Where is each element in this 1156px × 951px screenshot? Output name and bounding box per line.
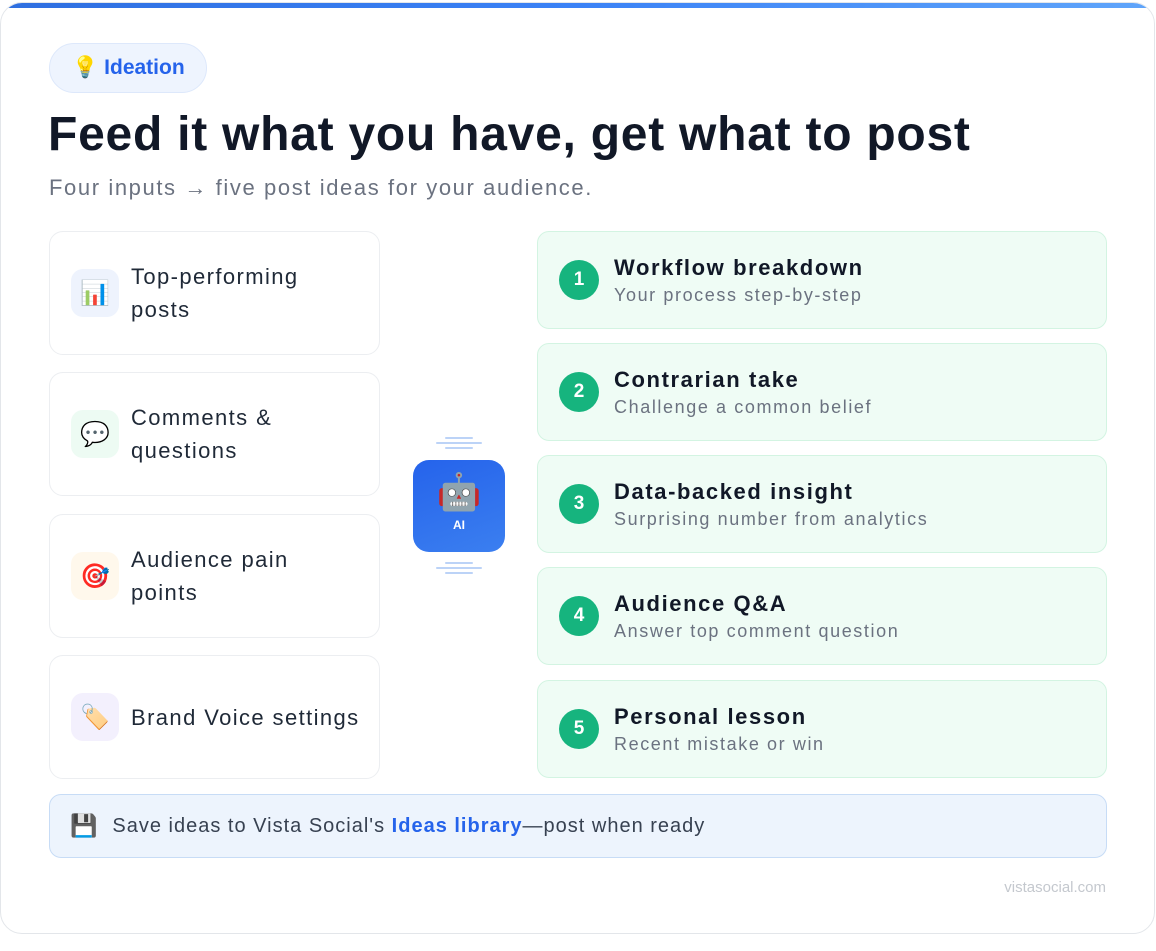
input card: brand voice: 🏷️ [80,704,110,730]
decorative lines top [436,437,482,449]
input card: pain points: points [131,580,198,605]
input card: top-performing posts: Top-performing [131,264,299,289]
input card: top-performing posts: 📊 [80,280,110,306]
input card: top-performing posts: posts [131,297,191,322]
input card: comments: 💬 [80,420,110,448]
input card: comments [49,372,380,496]
output 3 [537,455,1107,553]
pill: Ideation: 💡 [72,56,98,79]
output 4: Answer top comment question [614,621,899,641]
output 4: Audience Q&A [614,591,787,616]
url: vistasocial.com [1004,879,1106,896]
title: Feed it what you have, get what to post [48,108,971,161]
input card: pain points [49,514,380,638]
input card: pain points: Audience pain [131,547,289,572]
output 5: Recent mistake or win [614,734,825,754]
input card: comments: Comments & [131,405,272,430]
footer callout [49,794,1107,858]
subtitle: Four inputs → five post ideas for your audience. [49,175,593,200]
input card: brand voice: Brand Voice settings [131,704,360,730]
pill: Ideation: Ideation [104,56,185,79]
output 5: 5 [574,718,584,739]
output 4 [537,567,1107,665]
output 2: 2 [574,381,584,402]
output 2 [537,343,1107,441]
output 2: Contrarian take [614,367,799,392]
output 3: Data-backed insight [614,479,853,504]
output 3: 3 [574,493,584,514]
output 3: Surprising number from analytics [614,509,928,529]
footer callout: Save ideas to Vista Social's Ideas library—post when ready [112,814,705,836]
output 5 [537,680,1107,778]
input card: pain points: 🎯 [80,562,110,590]
output 1: Your process step-by-step [614,285,862,305]
input card: brand voice [49,655,380,779]
output 5: Personal lesson [614,704,807,729]
AI icon box [413,460,505,552]
AI icon box: AI [453,518,465,532]
decorative lines bottom [436,562,482,574]
footer callout: 💾 [70,813,98,838]
pill: Ideation [49,43,207,93]
output 4: 4 [574,605,584,626]
AI icon box: 🤖 [437,471,481,512]
output 2: Challenge a common belief [614,397,872,417]
output 1: 1 [574,269,584,290]
input card: top-performing posts [49,231,380,355]
output 1: Workflow breakdown [614,255,864,280]
output 1 [537,231,1107,329]
input card: comments: questions [131,438,238,463]
